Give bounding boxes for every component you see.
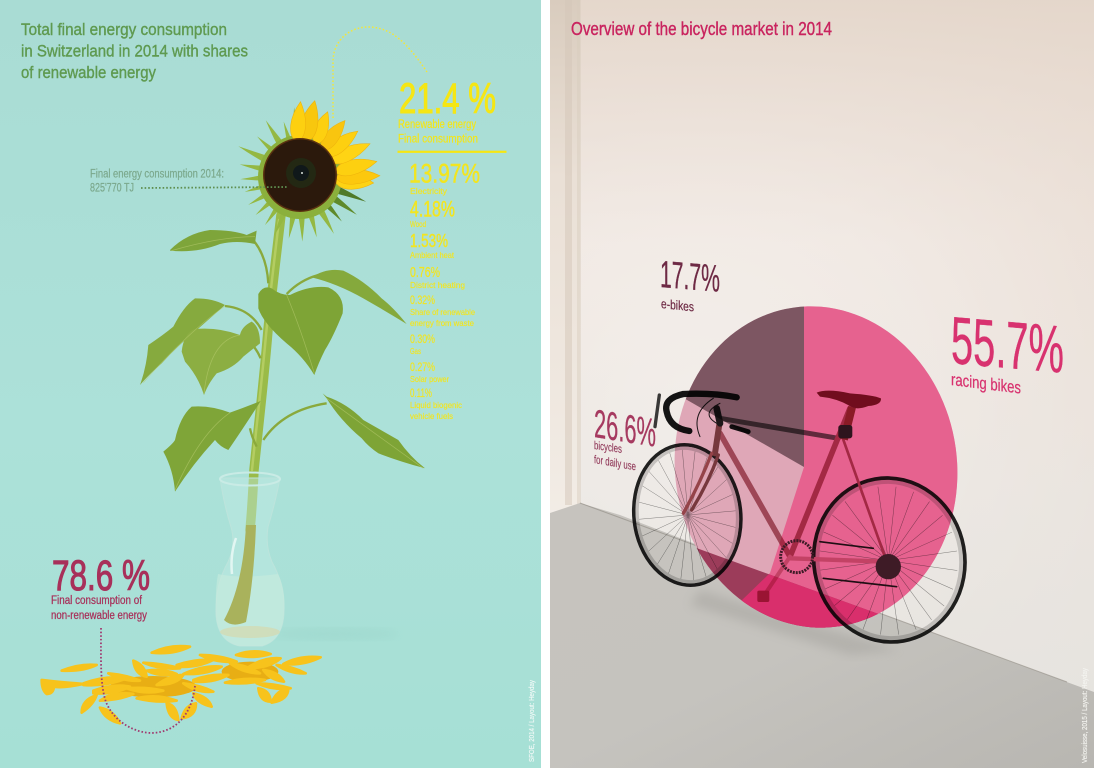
heading: energy title: of renewable energy xyxy=(21,63,156,82)
label: e-bikes 17.7%: e-bikes xyxy=(661,296,694,314)
flower disk xyxy=(263,138,337,212)
leaves xyxy=(140,230,425,492)
credit: left poster: SFOE, 2014 / Layout: Heyday xyxy=(529,680,536,762)
share: biofuels: 0.11% xyxy=(410,386,432,400)
callout: non-renewable 78.6 %: 78.6 % xyxy=(52,552,150,600)
callout: non-renewable 78.6 % xyxy=(51,552,150,622)
label: bicycles for daily use 26.6%: bicycles xyxy=(594,440,622,456)
vase base sediment xyxy=(220,626,280,638)
vase shadow xyxy=(270,628,400,640)
drivetrain xyxy=(757,541,901,602)
text: final energy consumption: Final energy consumption 2014: xyxy=(90,169,224,181)
share: solar power: Solar power xyxy=(410,374,449,384)
share: solar power: 0.27% xyxy=(410,360,435,374)
vase rim xyxy=(220,472,280,486)
share: waste: Share of renewable xyxy=(410,307,475,317)
text: final energy consumption xyxy=(90,169,224,195)
callout: non-renewable 78.6 %: Final consumption of xyxy=(51,595,143,607)
share: solar power xyxy=(410,360,449,384)
wall tint xyxy=(580,0,1094,700)
share: gas xyxy=(410,332,435,356)
share: electricity: 13.97% xyxy=(409,159,480,189)
flower sepals xyxy=(237,107,368,242)
share: district heating xyxy=(410,264,465,290)
skirting line xyxy=(580,503,1067,682)
heading: energy title xyxy=(21,20,248,82)
callout: renewable total 21.4 %: Final consumption xyxy=(398,134,478,146)
share: electricity xyxy=(409,159,480,196)
share: gas: 0.30% xyxy=(410,332,435,346)
leaf: mid left xyxy=(182,322,260,395)
callout: non-renewable 78.6 %: non-renewable energy xyxy=(51,610,147,622)
label: racing bikes 55.7%: racing bikes xyxy=(951,370,1021,398)
share: biofuels: Liquid biogenic xyxy=(410,400,463,410)
share: waste xyxy=(410,293,475,328)
bicycle xyxy=(627,391,978,654)
label: bicycles for daily use 26.6%: 26.6% xyxy=(594,401,656,456)
credit: right poster: Velosuisse, 2015 / Layout: Heyday xyxy=(1082,668,1089,763)
sector: racing bikes xyxy=(742,306,958,628)
dotted line: maroon arc through petals xyxy=(101,628,195,733)
dotted line: final energy pointer xyxy=(141,187,288,188)
bicycle floor shadow xyxy=(690,590,900,655)
glass highlight xyxy=(232,538,236,574)
leaf: far left xyxy=(140,298,225,385)
dotted line: yellow callout arc xyxy=(333,27,427,118)
share: waste: energy from waste xyxy=(410,318,474,328)
share: ambient heat: Ambient heat xyxy=(410,250,455,260)
share: ambient heat: 1.53% xyxy=(410,231,448,251)
share: wood: Wood xyxy=(410,219,426,229)
label: e-bikes 17.7% xyxy=(660,254,720,314)
heading: energy title: Total final energy consumption xyxy=(21,20,227,39)
share: district heating: 0.76% xyxy=(410,264,440,281)
share: biofuels xyxy=(410,386,463,421)
illustration: sunflower plant xyxy=(140,99,425,530)
petal shadow masses xyxy=(110,676,197,697)
vase xyxy=(216,472,284,646)
share: gas: Gas xyxy=(410,346,421,356)
front wheel xyxy=(627,439,748,591)
pie chart: bicycle market shares xyxy=(674,306,958,628)
share: wood xyxy=(410,197,455,229)
seat post and saddle xyxy=(817,391,881,440)
share: ambient heat xyxy=(410,231,455,260)
panel: Swiss energy consumption poster xyxy=(0,0,541,768)
share: waste: 0.32% xyxy=(410,293,435,307)
leaf veins xyxy=(143,237,423,490)
leaf: top left xyxy=(170,230,257,251)
sector: e-bikes xyxy=(686,306,804,467)
frame xyxy=(683,408,897,597)
label: e-bikes 17.7%: 17.7% xyxy=(660,254,720,301)
share: district heating: District heating xyxy=(410,280,465,290)
sector: bicycles for daily use xyxy=(674,306,958,614)
concrete floor xyxy=(550,503,1094,768)
stem inside water xyxy=(224,525,256,625)
heading: energy title: in Switzerland in 2014 with shares xyxy=(21,42,248,60)
wall xyxy=(550,0,1094,768)
share: electricity: Electricity xyxy=(410,186,448,196)
flower petals xyxy=(289,99,380,191)
leaf: lower left xyxy=(163,401,261,492)
panel background: turquoise xyxy=(0,0,541,768)
leaf: lower right xyxy=(323,393,425,468)
rear wheel xyxy=(801,466,978,654)
stem xyxy=(250,215,281,530)
floor tint of pie xyxy=(696,548,878,628)
heading: bicycle market title: Overview of the bicycle market in 2014 xyxy=(571,19,832,39)
label: bicycles for daily use 26.6% xyxy=(594,401,656,473)
callout: renewable total 21.4 % xyxy=(398,75,506,152)
callout: renewable total 21.4 %: 21.4 % xyxy=(399,75,496,123)
list: renewable energy shares xyxy=(409,159,480,421)
callout: renewable total 21.4 %: Renewable energy xyxy=(398,119,476,131)
petioles xyxy=(225,237,327,447)
label: bicycles for daily use 26.6%: for daily use xyxy=(594,454,636,473)
panel: bicycle market poster xyxy=(550,0,1094,768)
wall corner strip xyxy=(550,0,581,510)
share: biofuels: vehicle fuels xyxy=(410,411,453,421)
leaf: large centre xyxy=(258,287,343,375)
fallen petals xyxy=(42,646,321,723)
water xyxy=(216,574,284,646)
text: final energy consumption: 825'770 TJ xyxy=(90,183,134,195)
leaf: upper right xyxy=(312,270,407,324)
share: wood: 4.18% xyxy=(410,197,455,222)
handlebar xyxy=(655,394,748,437)
